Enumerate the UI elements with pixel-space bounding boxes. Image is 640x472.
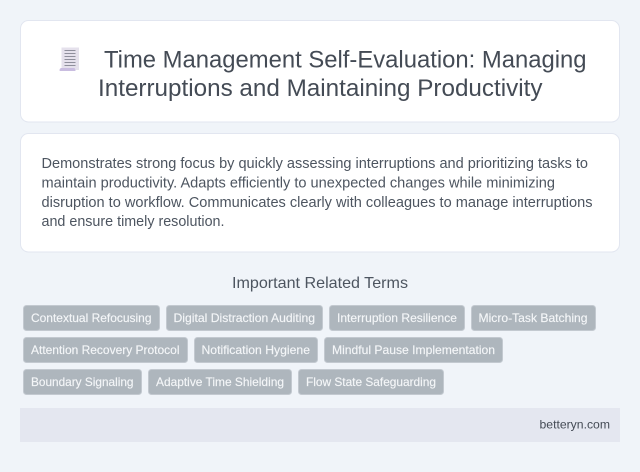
description text: maintain productivity. Adapts efficiently to unexpected changes while minimizing: [42, 176, 555, 192]
tag: Micro-Task Batching: Micro-Task Batching: [478, 311, 588, 325]
tag: Micro-Task Batching: [472, 306, 596, 330]
footer source text: betteryn.com: [540, 418, 610, 432]
icon: document scroll: [60, 48, 79, 71]
tag: Interruption Resilience: [330, 306, 464, 330]
tag: Contextual Refocusing: Contextual Refocusing: [31, 311, 152, 325]
title: Time Management Self-Evaluation: Managing: [104, 46, 586, 74]
tag: Attention Recovery Protocol: Attention Recovery Protocol: [31, 343, 180, 357]
footer bar: [20, 408, 620, 442]
tag: Notification Hygiene: [194, 338, 318, 362]
tag: Digital Distraction Auditing: Digital Distraction Auditing: [174, 311, 315, 325]
description text: disruption to workflow. Communicates clearly with colleagues to manage interruptions: [42, 195, 592, 211]
tag: Contextual Refocusing: [24, 306, 160, 330]
panel: description card: [20, 134, 620, 252]
tag: Mindful Pause Implementation: [324, 338, 502, 362]
tag: Boundary Signaling: [24, 370, 142, 394]
title: Interruptions and Maintaining Productivity: [98, 75, 542, 102]
tag: Attention Recovery Protocol: [24, 338, 188, 362]
tag: Adaptive Time Shielding: [148, 370, 292, 394]
tag: Digital Distraction Auditing: [166, 306, 322, 330]
tag list: [24, 306, 596, 394]
heading: related terms: Important Related Terms: [232, 275, 408, 292]
description text: and ensure timely resolution.: [42, 214, 224, 230]
description text: Demonstrates strong focus by quickly assessing interruptions and prioritizing tasks to: [42, 156, 588, 172]
description text: [42, 156, 592, 230]
panel: title card: [20, 20, 620, 122]
tag: Mindful Pause Implementation: Mindful Pause Implementation: [332, 343, 495, 357]
tag: Notification Hygiene: Notification Hygiene: [202, 343, 310, 357]
tag: Flow State Safeguarding: [298, 370, 444, 394]
tag: Interruption Resilience: Interruption Resilience: [337, 311, 457, 325]
tag: Adaptive Time Shielding: Adaptive Time Shielding: [156, 375, 284, 389]
tag: Flow State Safeguarding: Flow State Safeguarding: [306, 375, 436, 389]
tag: Boundary Signaling: Boundary Signaling: [31, 375, 134, 389]
title: [98, 46, 586, 102]
